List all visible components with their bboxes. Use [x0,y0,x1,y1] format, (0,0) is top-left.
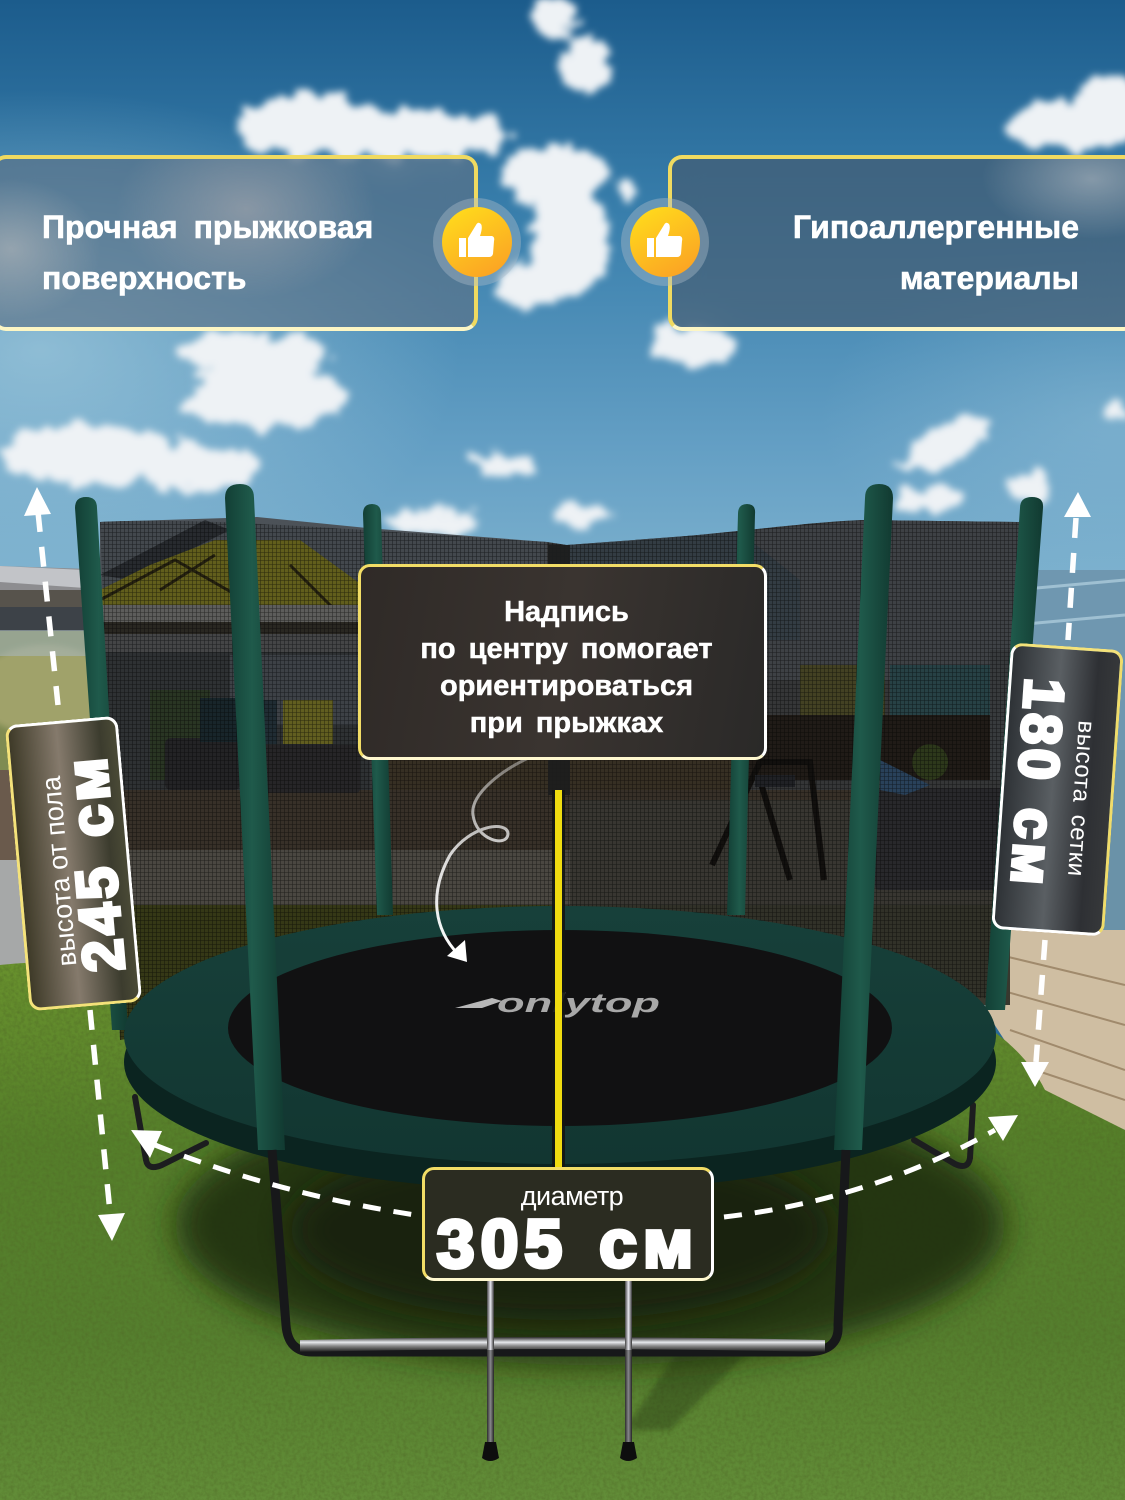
panel text [793,209,1079,296]
arrow head of curved arrow [447,940,467,962]
panel text: материалы [900,260,1079,296]
sky [0,0,1125,640]
back netting with patio behind it [100,517,1020,1040]
logo on the mat [455,988,660,1018]
ground shadow under trampoline [175,1085,1005,1430]
centre marking with yellow line [548,545,570,1175]
logo on the mat: onlytop [497,988,660,1018]
callout text: при прыжках [470,707,663,739]
dashed arrow: diameter [131,1115,1018,1217]
callout text: по центру помогает [420,633,713,665]
dashed arrow: height from floor [24,487,125,1241]
front legs with chrome bar [272,1150,846,1352]
callout: height from floor [5,716,142,1011]
callout: diameter [422,1167,714,1281]
panel text: Прочная прыжковая [42,209,373,245]
value: 245 cm: 245 см [53,751,137,974]
value: 180 cm: 180 см [999,676,1076,890]
curved arrow to the logo [437,755,535,954]
clouds [0,0,1125,535]
label: height from floor: высота от пола [35,775,82,967]
label: diameter: диаметр [521,1181,623,1211]
callout: net height [991,642,1124,937]
callout: centre inscription [358,564,767,760]
label: net height: высота сетки [1062,719,1099,877]
side legs [135,1097,973,1167]
panel: hypoallergenic materials [668,155,1125,331]
icon: thumbs up right [621,198,709,286]
jump pad [124,906,996,1191]
value: 305 cm: 305 см [437,1206,699,1282]
panel: strong jumping surface [0,155,478,331]
panel text: Гипоаллергенные [793,209,1079,245]
panel text [42,209,373,296]
background: left building and trees [0,566,230,970]
front poles [225,484,893,1150]
grass lawn [0,940,1125,1500]
back poles [75,497,1043,1030]
ladder [482,1280,637,1461]
icon: thumbs up left [433,198,521,286]
callout text: Надпись [504,596,629,628]
background: right house and deck [980,570,1125,1130]
dashed arrow: net height [1021,492,1091,1087]
panel text: поверхность [42,260,246,296]
callout text: ориентироваться [440,670,693,702]
callout text [420,596,713,739]
